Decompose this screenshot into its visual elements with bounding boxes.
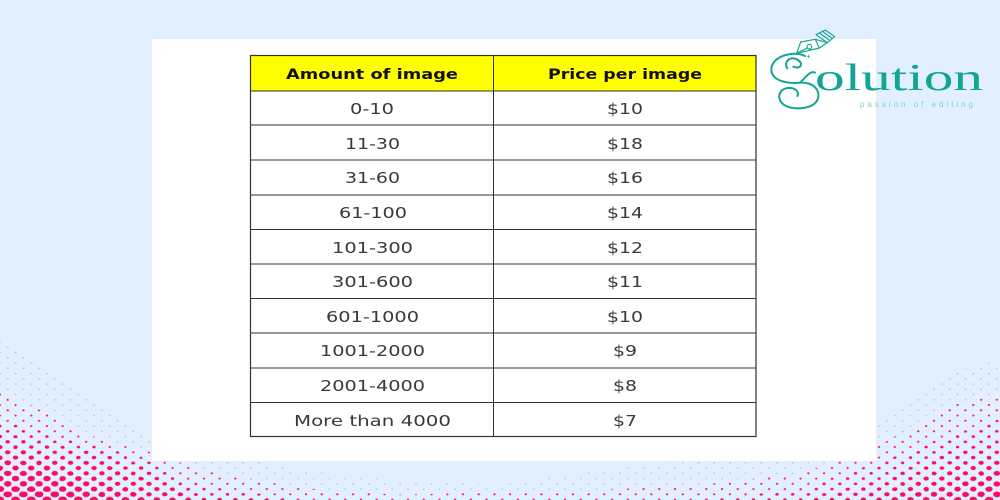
amount column [294,100,451,430]
logo wordmark: olution [815,57,983,99]
price column: $8 [613,377,637,395]
amount column: 2001-4000 [320,377,425,395]
price column: $7 [613,412,637,430]
amount column: 301-600 [332,273,413,291]
price column: $11 [607,273,643,291]
amount column: 0-10 [350,100,394,118]
price column [607,100,643,430]
icon: swirl letter S [771,54,818,108]
price column: $9 [613,342,637,360]
table grid [250,56,756,436]
amount column: 31-60 [345,169,400,187]
price column: $10 [607,100,643,118]
halftone dot wave [0,340,1000,500]
white panel [152,39,876,461]
table headings: Amount of image [286,67,458,83]
amount column: 11-30 [345,135,400,153]
amount column: More than 4000 [294,412,451,430]
amount column: 61-100 [339,204,407,222]
price column: $10 [607,308,643,326]
table headings [286,67,702,83]
price column: $18 [607,135,643,153]
table header fill [251,56,756,91]
price column: $16 [607,169,643,187]
price column: $14 [607,204,643,222]
logo tagline: passion of editing [860,100,973,109]
table headings: Price per image [548,67,702,83]
price column: $12 [607,239,643,257]
icon: fountain pen nib [797,30,835,58]
pricing table [250,56,756,436]
logo [771,30,983,109]
amount column: 601-1000 [326,308,419,326]
amount column: 101-300 [332,239,413,257]
amount column: 1001-2000 [320,342,425,360]
